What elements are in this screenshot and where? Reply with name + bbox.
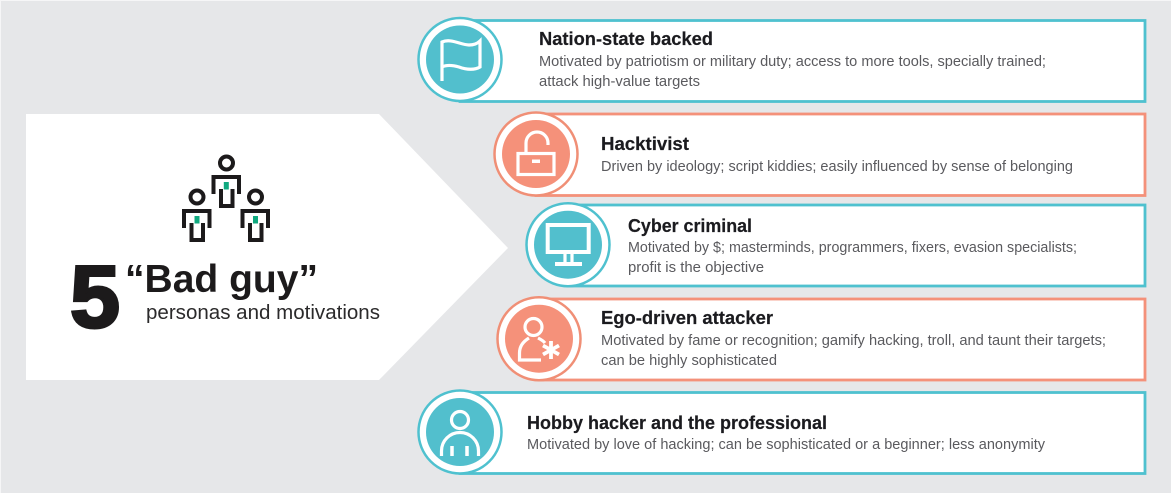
panel: ego-driven attacker — [498, 297, 1145, 380]
description: Motivated by fame or recognition; gamify hacking, troll, and taunt their targets; — [601, 333, 1106, 349]
panel: intro arrow — [26, 114, 508, 380]
icon: flag — [418, 18, 502, 101]
heading: Cyber criminal — [628, 216, 752, 236]
description — [601, 333, 1106, 369]
description: Motivated by $; masterminds, programmers, fixers, evasion specialists; — [628, 240, 1077, 256]
heading: Hacktivist — [601, 134, 689, 154]
subheading: personas and motivations — [146, 302, 380, 324]
arrow shape — [26, 114, 508, 380]
card frame — [536, 114, 1145, 196]
card frame — [460, 392, 1145, 474]
description: attack high-value targets — [539, 74, 700, 90]
heading: Nation-state backed — [539, 29, 713, 49]
description — [539, 54, 1046, 90]
icon: person — [418, 390, 502, 474]
description: Driven by ideology; script kiddies; easily influenced by sense of belonging — [601, 159, 1073, 175]
description: Motivated by love of hacking; can be sophisticated or a beginner; less anonymity — [527, 437, 1046, 453]
big number 5: 5 — [70, 247, 120, 346]
panel: hacktivist — [494, 112, 1145, 196]
heading: Bad guy: “Bad guy” — [125, 258, 318, 301]
card frame — [539, 299, 1145, 380]
heading: Ego-driven attacker — [601, 308, 773, 328]
icon: monitor — [526, 203, 610, 286]
card frame — [460, 20, 1145, 102]
icon: open padlock — [494, 112, 578, 196]
description: profit is the objective — [628, 260, 764, 276]
heading: Hobby hacker and the professional — [527, 413, 827, 433]
card frame — [568, 205, 1145, 286]
description — [628, 240, 1077, 276]
panel: nation-state backed — [418, 18, 1145, 102]
description: Motivated by patriotism or military duty; access to more tools, specially trained; — [539, 54, 1046, 70]
panel: cyber criminal — [526, 203, 1145, 286]
description: can be highly sophisticated — [601, 353, 777, 369]
panel: hobby hacker and the professional — [418, 390, 1145, 474]
icon: person with asterisk — [498, 297, 580, 380]
icon: three people — [184, 156, 268, 240]
